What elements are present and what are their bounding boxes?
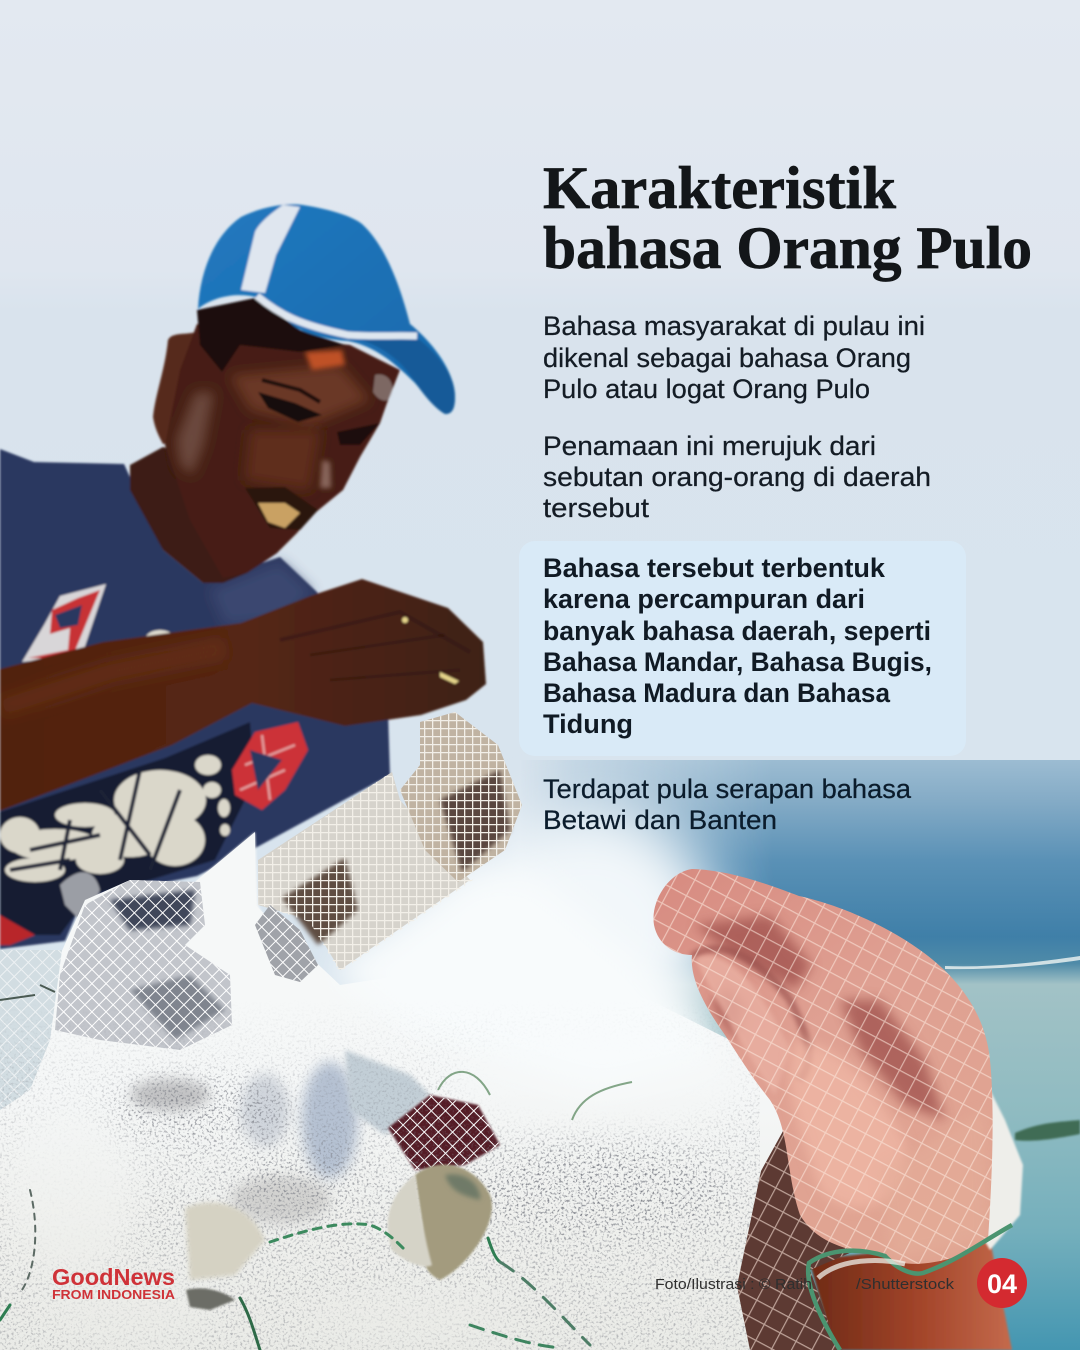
paragraph 2: tersebut	[543, 493, 650, 523]
ear	[153, 332, 198, 444]
cap	[198, 204, 455, 414]
shirt print: white flower	[0, 722, 255, 935]
net: second stone	[185, 1203, 265, 1280]
net: small lump	[255, 905, 318, 982]
highlight panel	[519, 541, 966, 756]
net: green lead lines	[0, 1190, 590, 1350]
net: dark knot near logo	[186, 1288, 235, 1310]
highlight panel: banyak bahasa daerah, seperti	[543, 616, 931, 646]
arm and hand	[0, 579, 486, 811]
title: Karakteristik	[543, 155, 897, 221]
logo: GoodNews from Indonesia: FROM INDONESIA	[52, 1288, 175, 1302]
net: sinker stone	[388, 1165, 492, 1280]
cap brim shade	[360, 340, 455, 414]
forearm	[809, 1240, 1012, 1350]
photo credit: Foto/Ilustrasi : © Ratih	[655, 1276, 812, 1293]
mouth	[245, 487, 318, 530]
hair and sunglasses	[197, 298, 345, 372]
net: main white mass	[0, 712, 790, 1350]
shirt print: emblem	[22, 584, 175, 662]
page number badge	[977, 1258, 1027, 1308]
finger highlight	[695, 956, 790, 1095]
wrist mesh: dark	[737, 1122, 880, 1350]
net: maroon object	[388, 1095, 500, 1170]
net: right side bulge	[960, 1080, 1023, 1250]
face	[165, 324, 400, 578]
rings	[440, 672, 459, 684]
paragraph 1: Pulo atau logat Orang Pulo	[543, 374, 870, 404]
shirt	[0, 449, 390, 949]
highlight panel: Tidung	[543, 709, 633, 739]
finger separation	[692, 949, 809, 1080]
cap stripe	[241, 205, 300, 293]
shirt collar light	[210, 562, 312, 625]
net: soft glow on white area	[330, 870, 720, 1090]
palm shadow	[695, 915, 945, 1120]
net: thin weed strands	[438, 1072, 632, 1120]
net: blue bottle	[345, 1050, 430, 1135]
paragraph 2: Penamaan ini merujuk dari	[543, 431, 876, 461]
highlight panel: Bahasa tersebut terbentuk	[543, 553, 886, 583]
logo: GoodNews from Indonesia	[52, 1264, 175, 1302]
paragraph 1: Bahasa masyarakat di pulau ini	[543, 311, 925, 341]
photo credit: /Shutterstock	[856, 1276, 955, 1293]
highlight panel: Bahasa Mandar, Bahasa Bugis,	[543, 647, 932, 677]
title: bahasa Orang Pulo	[543, 215, 1032, 281]
net: white triangle fold	[195, 832, 300, 1000]
highlight panel: Bahasa Madura dan Bahasa	[543, 678, 891, 708]
paragraph 3: Betawi dan Banten	[543, 805, 777, 835]
title	[543, 155, 1032, 281]
paragraph 2	[543, 431, 931, 523]
eyes and brows	[258, 374, 393, 445]
thumb highlight	[790, 1040, 906, 1208]
paragraph 2: sebutan orang-orang di daerah	[543, 462, 931, 492]
green lead line on wrist	[808, 1225, 1012, 1350]
net: lower shapes seen through	[130, 1062, 358, 1224]
net: over shirt	[258, 772, 470, 970]
paragraph 1	[543, 311, 925, 404]
net: soft glow left of the hand	[465, 810, 715, 1050]
paragraph 1: dikenal sebagai bahasa Orang	[543, 343, 911, 373]
cap brim edge	[257, 296, 417, 336]
neck	[130, 447, 300, 583]
page number badge: 04	[987, 1269, 1017, 1299]
palm and fingers	[654, 869, 993, 1264]
paragraph 3	[543, 774, 912, 835]
photo: fisherman	[0, 204, 486, 949]
background: sea and shore	[520, 760, 1080, 1350]
logo: GoodNews from Indonesia: GoodNews	[52, 1264, 175, 1290]
net: held bundle	[400, 712, 522, 882]
photo credit	[655, 1276, 955, 1293]
lower palm	[880, 1110, 988, 1260]
photo: netted hand	[640, 860, 1023, 1350]
highlight panel: karena percampuran dari	[543, 584, 865, 614]
paragraph 3: Terdapat pula serapan bahasa	[543, 774, 912, 804]
net: left edge	[0, 950, 62, 1110]
hand net overlay	[654, 870, 992, 1264]
face highlights	[176, 350, 370, 490]
net: speckled lower texture	[0, 1000, 760, 1350]
net: left lump	[55, 880, 232, 1050]
shirt print: red character	[232, 722, 308, 810]
